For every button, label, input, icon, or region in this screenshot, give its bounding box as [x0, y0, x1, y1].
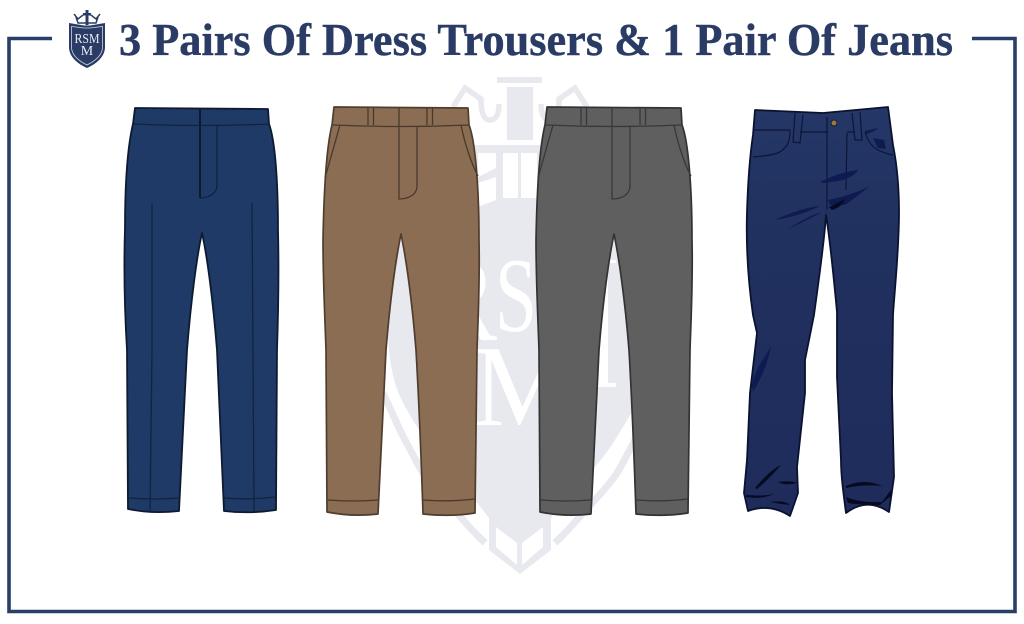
watermark: shield crest [383, 77, 657, 574]
watermark monogram: M: M [473, 323, 573, 451]
icon: logo crest: RSM [74, 32, 100, 47]
trousers: grey dress trousers [536, 107, 692, 515]
trousers: navy dress trousers [124, 108, 278, 512]
jeans button [831, 120, 837, 126]
trousers: tan dress trousers [323, 107, 479, 515]
icon: logo crest [69, 10, 105, 68]
jeans: dark indigo pair [744, 107, 899, 516]
watermark monogram: R: R [430, 233, 497, 366]
icon: logo crest: M [81, 44, 94, 59]
title: 3 Pairs Of Dress Trousers & 1 Pair Of Jeans [119, 15, 953, 65]
watermark monogram: S: S [495, 237, 537, 354]
